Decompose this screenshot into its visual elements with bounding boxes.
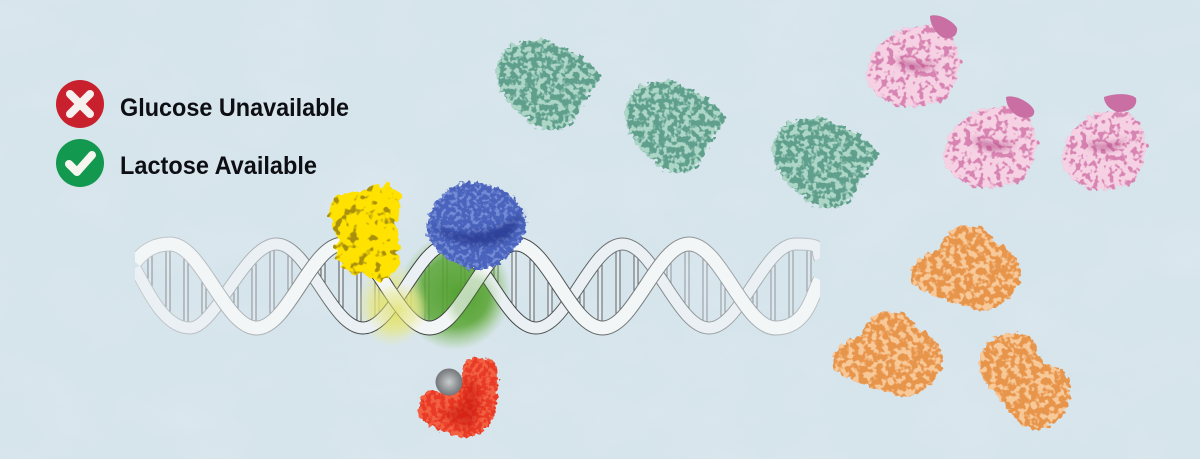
label: Glucose Unavailable: Glucose Unavailable	[120, 94, 349, 122]
protein: red CAP activator with cAMP	[418, 358, 498, 438]
teal proteins: beta-galactosidase	[497, 39, 878, 208]
grey sphere: cAMP	[436, 368, 462, 396]
pink protein 1	[867, 15, 960, 107]
pink tab	[930, 15, 957, 38]
tinted ribbon overlay	[369, 269, 500, 334]
orange protein 1	[909, 226, 1020, 312]
helix strand A	[135, 244, 820, 328]
orange protein 3	[980, 333, 1070, 430]
pink tab	[1104, 94, 1136, 112]
pink proteins: lactose permease	[867, 15, 1147, 190]
pink protein 2	[944, 96, 1037, 188]
helix base pair rungs	[148, 250, 812, 322]
teal protein 1	[497, 39, 599, 130]
pink protein 3	[1062, 94, 1147, 190]
pink tab	[1006, 96, 1034, 118]
teal protein 3	[773, 117, 878, 208]
icon: red cross, glucose unavailable	[56, 80, 104, 128]
label: Lactose Available: Lactose Available	[120, 152, 317, 180]
protein: yellow CAP on DNA	[330, 184, 400, 280]
orange proteins: transacetylase	[831, 226, 1070, 430]
polymerase central cleft shading	[432, 212, 524, 246]
green glow: promoter region	[403, 242, 510, 348]
legend: glucose and lactose status	[56, 80, 349, 187]
red protein dark core	[440, 375, 479, 427]
DNA double helix	[135, 234, 820, 350]
teal protein 2	[626, 80, 724, 173]
protein: blue RNA polymerase	[427, 182, 526, 269]
orange protein 2	[831, 312, 942, 398]
yellow glow: CAP binding region	[358, 266, 426, 344]
helix strand B	[135, 244, 820, 328]
icon: green check, lactose available	[56, 139, 104, 187]
